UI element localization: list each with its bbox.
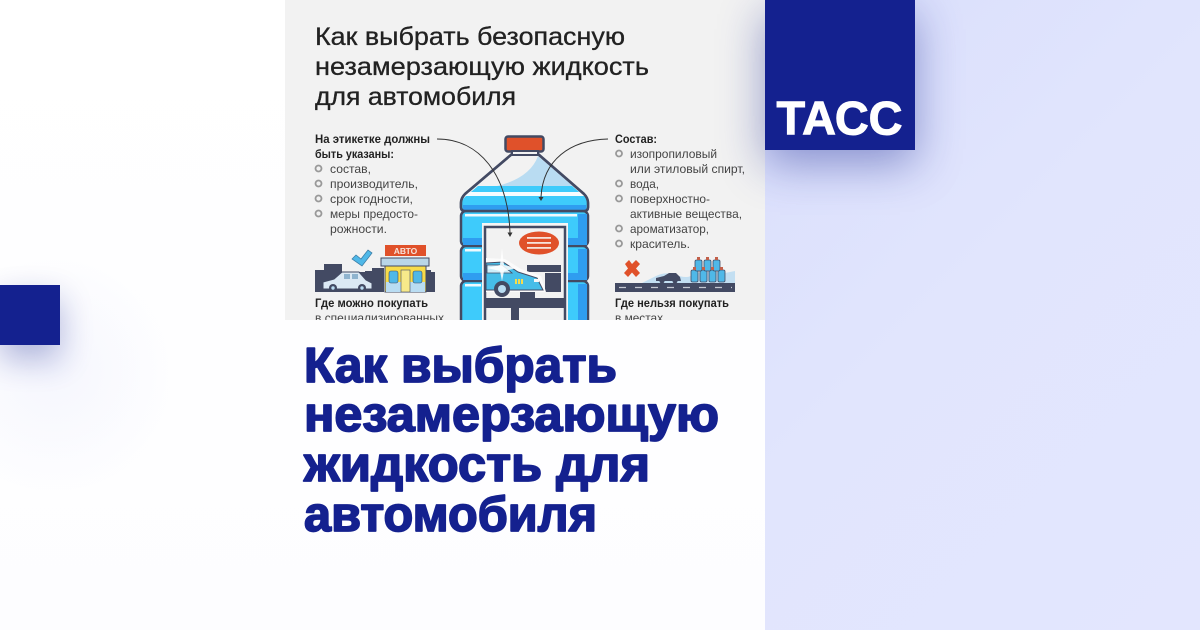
red cross: [624, 260, 640, 277]
composition text: вода,: [630, 177, 659, 191]
composition text: ароматизатор,: [630, 222, 709, 236]
shop: [381, 258, 429, 266]
composition text: изопропиловый: [630, 147, 717, 161]
infographic title: незамерзающую жидкость: [315, 53, 649, 81]
label stand: [485, 298, 565, 308]
hill: [642, 271, 735, 283]
arrow: composition to bottle: [538, 139, 608, 201]
bottle segments: [461, 154, 588, 326]
label car: [486, 248, 546, 297]
bottle shoulder outline: [461, 154, 588, 211]
composition text: краситель.: [630, 237, 690, 251]
dark car: [656, 273, 681, 284]
where to buy caption: [315, 296, 444, 325]
car: [323, 272, 372, 289]
label requirements text: срок годности,: [330, 192, 413, 206]
composition text: Состав:: [615, 132, 657, 146]
bottle label: [482, 223, 568, 323]
icon: where not to buy, roadside: [615, 257, 735, 292]
logo block: [765, 0, 915, 150]
decorative square: [0, 285, 60, 345]
label oval: [519, 232, 559, 254]
avto sign: [385, 245, 426, 256]
where not to buy caption: [615, 296, 729, 325]
infographic title: [315, 23, 649, 111]
headline: незамерзающую: [304, 388, 719, 442]
infographic preview panel: [285, 0, 765, 320]
bottles stack: [691, 260, 725, 282]
bottle cap: [506, 136, 544, 152]
left white background: [0, 0, 765, 630]
headline: Как выбрать: [304, 339, 617, 393]
right lavender panel: [765, 0, 1200, 630]
check mark: [352, 250, 372, 266]
label requirements text: быть указаны:: [315, 147, 394, 161]
headline: [302, 339, 719, 542]
headline: жидкость для: [303, 438, 650, 492]
label silhouette: [527, 265, 561, 272]
road: [615, 283, 735, 292]
label requirements text: состав,: [330, 162, 371, 176]
buildings: [315, 264, 384, 292]
where not to buy caption: Где нельзя покупать: [615, 296, 729, 310]
bottle highlights: [463, 214, 587, 320]
label requirements text: [315, 132, 430, 236]
soft glow by square: [0, 250, 180, 490]
arrow: label to bottle: [437, 139, 512, 237]
icon: bottle: [461, 136, 588, 326]
composition text: активные вещества,: [630, 207, 742, 221]
headline: автомобиля: [304, 488, 597, 542]
where to buy caption: Где можно покупать: [315, 296, 428, 310]
infographic title: для автомобиля: [315, 83, 516, 111]
label requirements text: На этикетке должны: [315, 132, 430, 146]
label requirements text: меры предосто-: [330, 207, 418, 221]
composition text: [615, 132, 745, 251]
infographic title: Как выбрать безопасную: [315, 23, 625, 51]
label requirements text: производитель,: [330, 177, 418, 191]
composition text: или этиловый спирт,: [630, 162, 745, 176]
label requirements text: рожности.: [330, 222, 387, 236]
water in bottle: [497, 156, 574, 187]
composition text: поверхностно-: [630, 192, 710, 206]
icon: where to buy, shop and car: [315, 245, 435, 292]
icon: where to buy, shop and car: АВТО: [394, 246, 418, 256]
logo wordmark: ТАСС: [776, 92, 902, 144]
